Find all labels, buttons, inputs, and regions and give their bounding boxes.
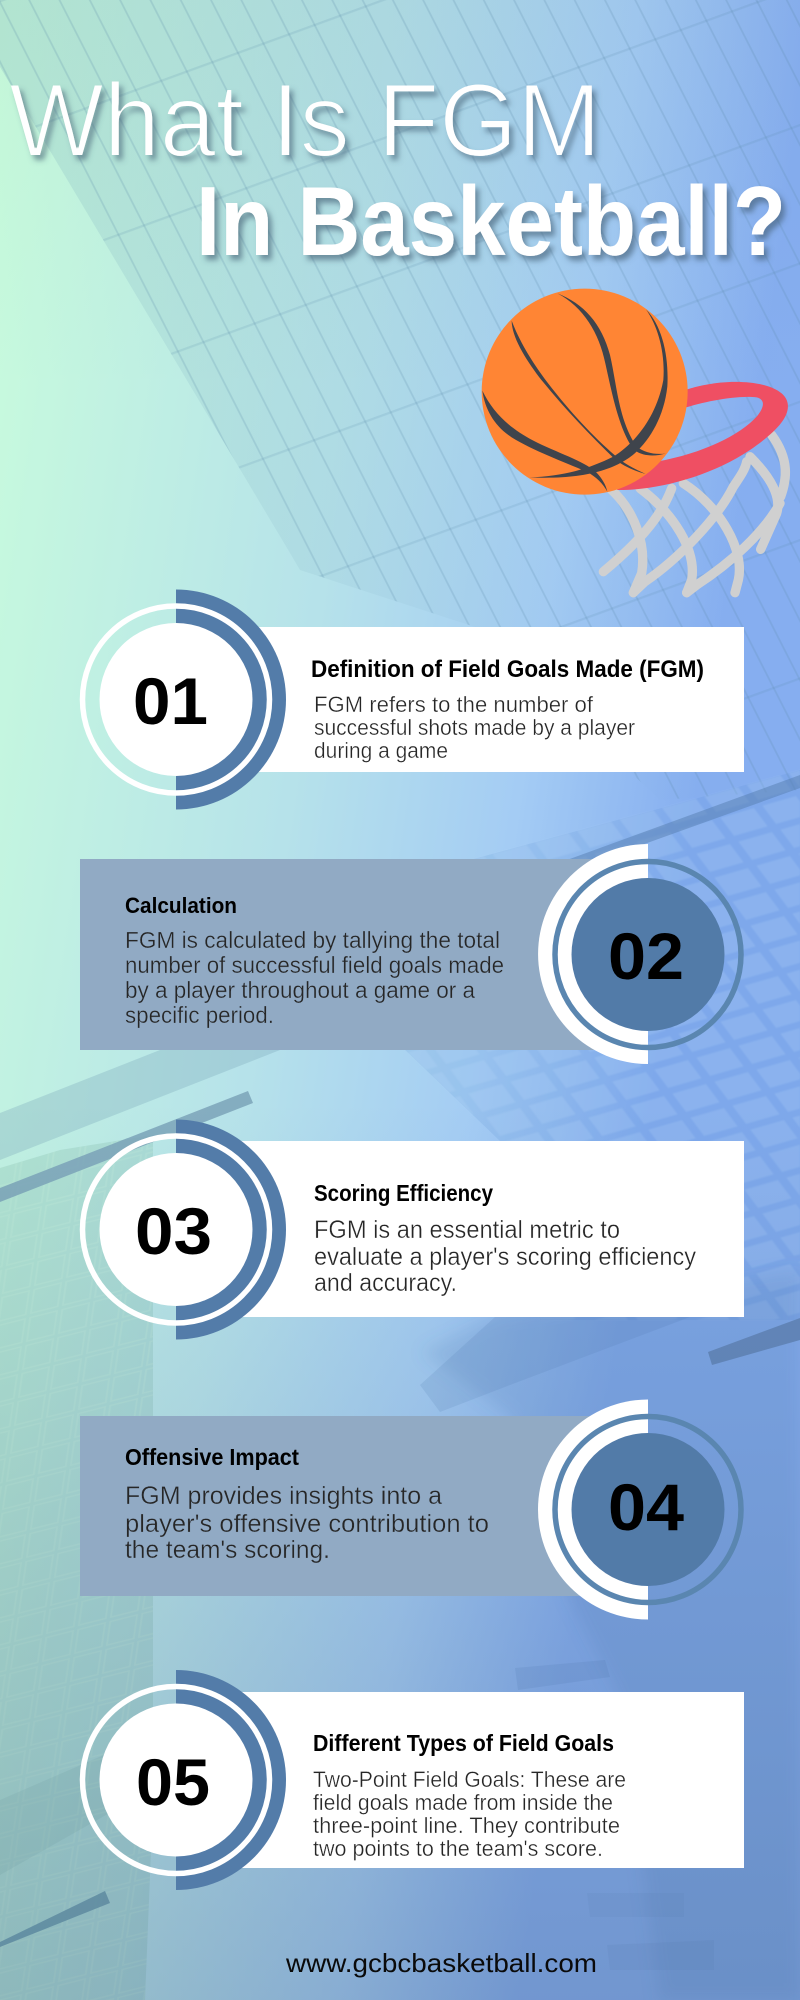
body text: successful shots made by a player — [314, 715, 635, 740]
card background — [80, 1416, 648, 1596]
number badge 05: 05 — [136, 1745, 210, 1819]
body text: two points to the team's score. — [313, 1836, 603, 1861]
body text: FGM provides insights into a — [125, 1482, 442, 1510]
body text: evaluate a player's scoring efficiency — [314, 1243, 696, 1271]
number badge 04: 04 — [608, 1470, 684, 1544]
heading: Different Types of Field Goals — [313, 1730, 614, 1756]
number badge 02: 02 — [608, 919, 684, 993]
number badge 03 — [82, 1120, 286, 1340]
panel: 04 offensive impact — [80, 1400, 741, 1620]
card background — [176, 627, 744, 772]
card background — [80, 859, 648, 1050]
number badge 01: 01 — [133, 664, 208, 738]
body text: the team's scoring. — [125, 1536, 330, 1564]
heading: Offensive Impact — [125, 1444, 299, 1470]
body text — [314, 1216, 696, 1297]
number badge 04 — [538, 1400, 741, 1620]
icon: ball — [482, 289, 688, 495]
icon: basketball and hoop — [482, 289, 788, 593]
body text: specific period. — [125, 1002, 274, 1028]
panel: 02 calculation — [80, 844, 741, 1064]
body text: FGM is an essential metric to — [314, 1216, 620, 1244]
body text: by a player throughout a game or a — [125, 977, 475, 1003]
heading: Definition of Field Goals Made (FGM) — [311, 656, 704, 683]
body text: FGM refers to the number of — [314, 692, 594, 717]
body text: three-point line. They contribute — [313, 1813, 620, 1838]
panel: 05 different types — [82, 1670, 744, 1890]
card background — [176, 1141, 744, 1317]
body text: Two-Point Field Goals: These are — [313, 1767, 626, 1792]
body text: and accuracy. — [314, 1269, 457, 1297]
body text — [125, 927, 504, 1028]
title — [9, 63, 786, 276]
icon: net — [603, 435, 785, 593]
body text — [313, 1767, 626, 1861]
heading: Scoring Efficiency — [314, 1180, 493, 1206]
body text — [314, 692, 635, 763]
card background — [176, 1692, 744, 1868]
panel: 03 scoring efficiency — [82, 1120, 744, 1340]
website footer: www.gcbcbasketball.com — [285, 1948, 597, 1978]
body text: player's offensive contribution to — [125, 1510, 489, 1538]
body text: number of successful field goals made — [125, 952, 504, 978]
number badge 02 — [538, 844, 741, 1064]
icon: rim — [617, 382, 788, 490]
title line one: What Is FGM — [9, 63, 601, 179]
number badge 05 — [82, 1670, 286, 1890]
number badge 01 — [82, 590, 286, 810]
panel: 01 definition — [82, 590, 744, 810]
body text: field goals made from inside the — [313, 1790, 613, 1815]
body text — [125, 1482, 489, 1564]
number badge 03: 03 — [135, 1194, 212, 1268]
body text: during a game — [314, 738, 448, 763]
body text: FGM is calculated by tallying the total — [125, 927, 500, 953]
heading: Calculation — [125, 893, 237, 918]
